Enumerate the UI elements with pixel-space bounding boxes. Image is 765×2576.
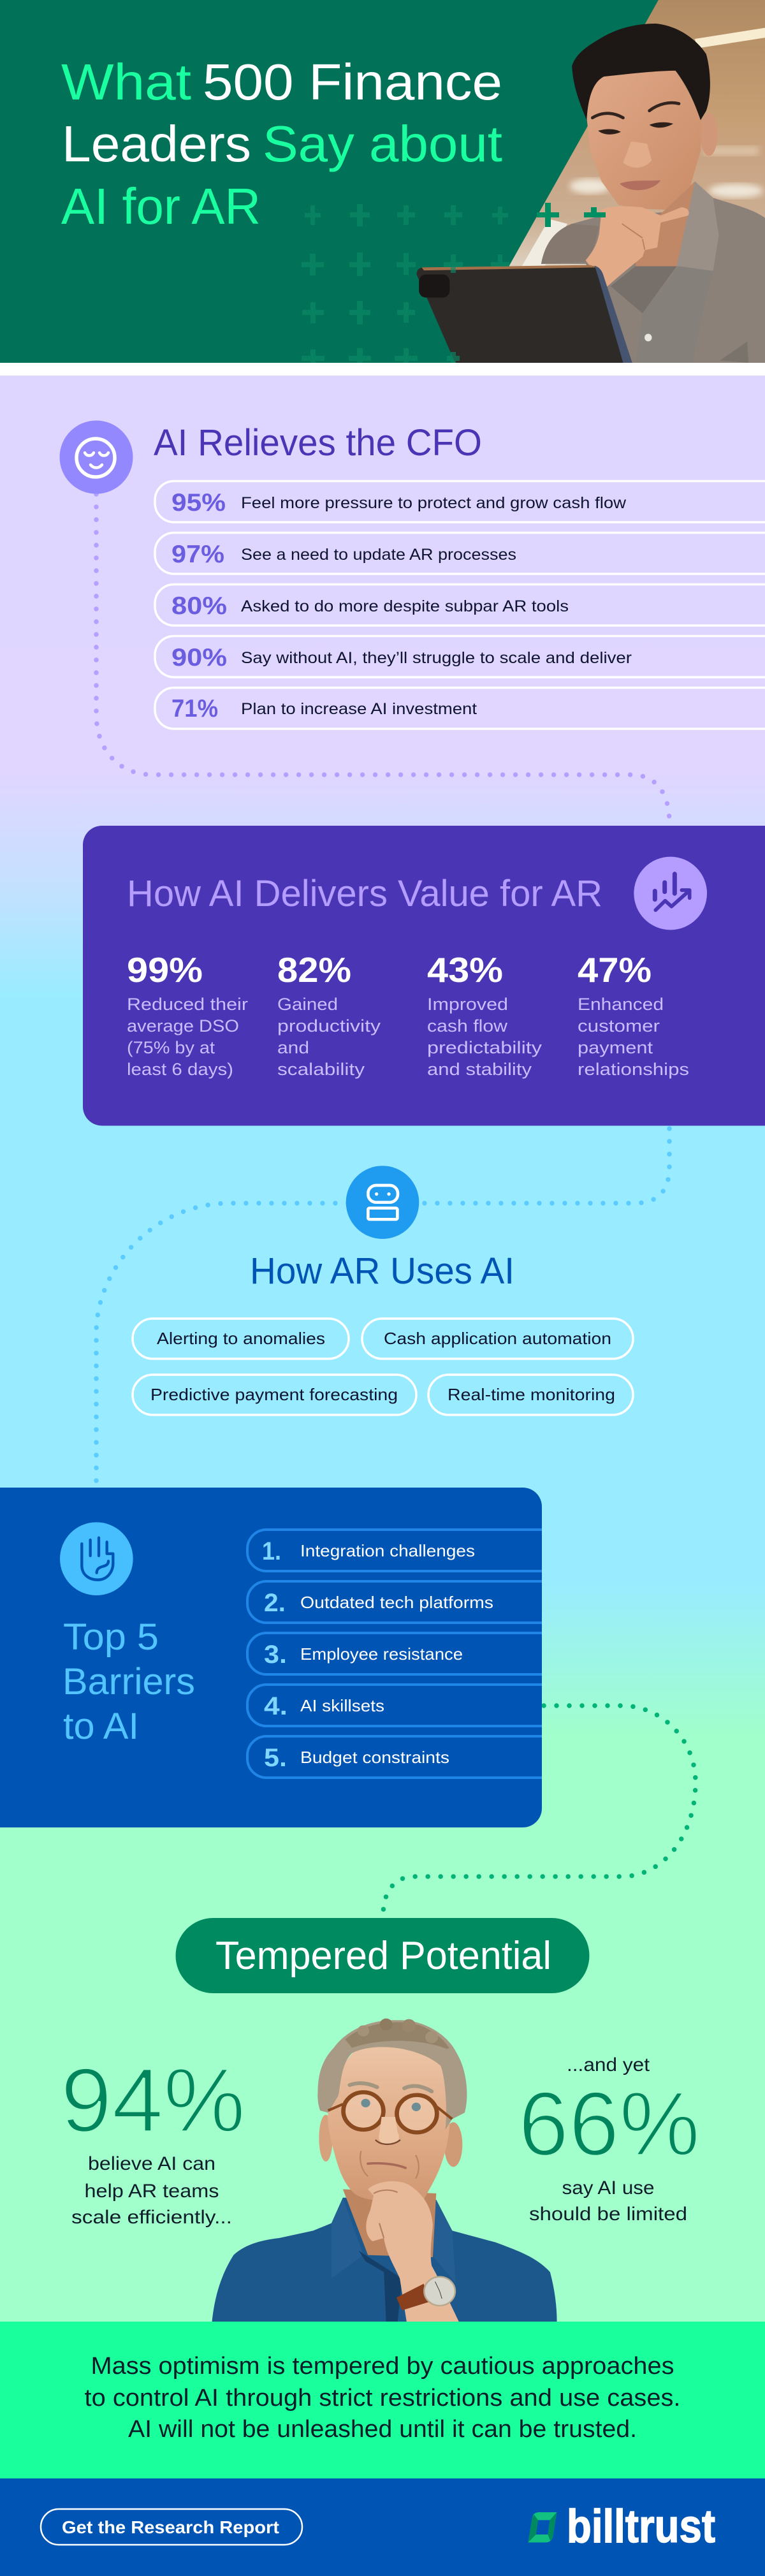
heading: to AI bbox=[63, 1706, 139, 1747]
stat 47%: payment bbox=[578, 1038, 653, 1057]
chip: real-time: Real-time monitoring bbox=[448, 1385, 615, 1404]
stat 94% bbox=[61, 2050, 245, 2228]
shirt bbox=[212, 2198, 557, 2322]
logo: billtrust: billtrust bbox=[567, 2501, 715, 2552]
title: Leaders bbox=[62, 115, 251, 172]
stat 47%: Enhanced bbox=[578, 995, 664, 1014]
barrier 4 bbox=[247, 1685, 542, 1726]
stat row 97%: See a need to update AR processes bbox=[241, 546, 516, 564]
heading: How AI Delivers Value for AR bbox=[127, 873, 602, 914]
barrier 4: 4. bbox=[264, 1692, 288, 1720]
stat 99%: average DSO bbox=[127, 1016, 239, 1036]
chip: cash application: Cash application automation bbox=[384, 1329, 611, 1348]
panel: AI Relieves the CFO bbox=[60, 421, 765, 729]
stat row 95% bbox=[155, 481, 765, 522]
hand bbox=[586, 206, 689, 288]
chip: cash application bbox=[362, 1319, 633, 1359]
stat row 90%: Say without AI, they’ll struggle to scale and deliver bbox=[241, 649, 632, 667]
chip: predictive: Predictive payment forecasting bbox=[150, 1385, 398, 1404]
stat 47% bbox=[578, 950, 689, 1079]
barrier 5: Budget constraints bbox=[300, 1748, 449, 1767]
plus pattern bbox=[302, 203, 606, 363]
title: Say about bbox=[263, 115, 502, 172]
barrier 5: 5. bbox=[264, 1744, 287, 1772]
stat 43%: cash flow bbox=[427, 1016, 508, 1036]
stat row 80%: Asked to do more despite subpar AR tools bbox=[241, 597, 569, 615]
panel: hero header bbox=[0, 0, 765, 363]
stat 82%: scalability bbox=[277, 1060, 365, 1079]
title: What bbox=[61, 54, 191, 110]
ear bbox=[701, 113, 718, 156]
stat 99%: 99% bbox=[127, 950, 203, 990]
stat row 90% bbox=[155, 636, 765, 677]
heading: Top 5 bbox=[63, 1616, 159, 1658]
icon: relaxed face bbox=[60, 421, 133, 494]
stat row 71%: Plan to increase AI investment bbox=[241, 700, 477, 718]
icon: chart trending up bbox=[634, 857, 707, 930]
panel: Top 5 Barriers to AI bbox=[0, 1488, 542, 1827]
dotted connector: barriers to tempered potential bbox=[383, 1706, 696, 1915]
nose and mouth bbox=[379, 2117, 399, 2144]
stat 43% bbox=[427, 950, 543, 1079]
stat row 71% bbox=[155, 687, 765, 729]
eyes bbox=[361, 2099, 370, 2107]
stat row 80% bbox=[155, 584, 765, 626]
stat 66%: say AI use bbox=[562, 2177, 654, 2199]
banner: conclusion text: Mass optimism is tempered by cautious approaches bbox=[91, 2353, 674, 2380]
button: get the report: Get the Research Report bbox=[62, 2517, 279, 2537]
stat row 80%: 80% bbox=[171, 592, 227, 620]
heading: AI Relieves the CFO bbox=[154, 422, 482, 464]
stat 43%: and stability bbox=[427, 1060, 532, 1079]
heading bbox=[62, 1616, 195, 1747]
hero photo: man with tablet bbox=[408, 0, 765, 363]
stat row 90%: 90% bbox=[171, 644, 227, 671]
barrier 5 bbox=[247, 1736, 542, 1778]
heading pill bbox=[176, 1918, 589, 1993]
stat 43%: 43% bbox=[427, 950, 503, 990]
stat 66%: should be limited bbox=[529, 2204, 687, 2225]
stat 66%: 66% bbox=[518, 2074, 700, 2175]
hand and arm bbox=[366, 2181, 459, 2322]
barrier 3: 3. bbox=[264, 1641, 287, 1669]
stat row 95%: Feel more pressure to protect and grow cash flow bbox=[241, 494, 627, 512]
watch bbox=[397, 2284, 430, 2310]
stat 47%: relationships bbox=[578, 1060, 689, 1079]
stat 43%: Improved bbox=[427, 995, 508, 1014]
chip: alerting: Alerting to anomalies bbox=[157, 1329, 325, 1348]
dotted connector: value panel to barriers bbox=[96, 1129, 669, 1486]
stat 47%: customer bbox=[578, 1016, 660, 1036]
neck bbox=[636, 181, 695, 267]
barrier 1 bbox=[247, 1530, 542, 1571]
stat 43%: predictability bbox=[427, 1038, 543, 1057]
panel: How AR Uses AI bbox=[133, 1166, 633, 1415]
panel: Tempered Potential bbox=[61, 1918, 700, 2322]
stat 94%: believe AI can bbox=[88, 2153, 215, 2174]
stat row 97% bbox=[155, 533, 765, 574]
stat 94%: help AR teams bbox=[84, 2181, 219, 2202]
icon: raised hand bbox=[60, 1522, 133, 1595]
heading: How AR Uses AI bbox=[250, 1250, 514, 1292]
barrier 1: 1. bbox=[262, 1537, 281, 1565]
dotted connector: CFO to value panel bbox=[96, 494, 669, 823]
glasses bbox=[344, 2092, 437, 2132]
photo: thoughtful older man bbox=[212, 2019, 557, 2322]
stat 82%: productivity bbox=[277, 1016, 381, 1036]
stat 99% bbox=[127, 950, 248, 1079]
title: 500 Finance bbox=[203, 54, 502, 110]
hair bbox=[317, 2020, 467, 2130]
banner: conclusion text: AI will not be unleashed until it can be trusted. bbox=[128, 2416, 637, 2443]
chip: alerting bbox=[133, 1319, 349, 1359]
title bbox=[61, 62, 502, 224]
barrier 3: Employee resistance bbox=[300, 1644, 463, 1664]
neck bbox=[343, 2189, 436, 2257]
panel: How AI Delivers Value for AR bbox=[83, 826, 765, 1126]
button: get the report bbox=[41, 2509, 302, 2545]
stat row 95%: 95% bbox=[171, 489, 226, 516]
stat 82%: and bbox=[277, 1038, 309, 1057]
tablet bbox=[417, 266, 631, 363]
ears bbox=[319, 2115, 333, 2162]
heading pill: Tempered Potential bbox=[215, 1934, 551, 1978]
footer bbox=[0, 2478, 765, 2576]
stat 82%: Gained bbox=[277, 995, 338, 1014]
stat 66%: ...and yet bbox=[567, 2054, 650, 2075]
stat row 97%: 97% bbox=[171, 541, 224, 568]
page background gradient bbox=[0, 376, 765, 2322]
icon: robot bbox=[346, 1166, 419, 1239]
stat 94%: 94% bbox=[61, 2050, 245, 2151]
face bbox=[328, 2044, 450, 2202]
brows, eyes, nose, mouth bbox=[592, 103, 679, 118]
banner: conclusion text bbox=[0, 2322, 765, 2478]
barrier 1: Integration challenges bbox=[300, 1541, 475, 1560]
stat 99%: least 6 days) bbox=[127, 1060, 233, 1079]
banner: conclusion text: to control AI through strict restrictions and use cases. bbox=[84, 2385, 681, 2411]
barrier 2 bbox=[247, 1581, 542, 1623]
stat 66% bbox=[518, 2054, 700, 2225]
chip: real-time bbox=[428, 1375, 633, 1415]
stat 82% bbox=[277, 950, 381, 1079]
barrier 2: Outdated tech platforms bbox=[300, 1593, 493, 1612]
heading: Barriers bbox=[62, 1661, 195, 1702]
title: AI for AR bbox=[61, 178, 261, 235]
barrier 4: AI skillsets bbox=[300, 1696, 384, 1715]
barrier 2: 2. bbox=[264, 1589, 286, 1617]
hair bbox=[572, 24, 710, 120]
barrier 3 bbox=[247, 1633, 542, 1674]
chip: predictive bbox=[133, 1375, 416, 1415]
stat 82%: 82% bbox=[277, 950, 351, 990]
stat 94%: scale efficiently... bbox=[71, 2207, 232, 2228]
stat row 71%: 71% bbox=[171, 695, 218, 722]
stat 47%: 47% bbox=[578, 950, 652, 990]
face bbox=[586, 71, 702, 210]
shirt bbox=[541, 181, 765, 363]
stat 99%: Reduced their bbox=[127, 995, 248, 1014]
stat 99%: (75% by at bbox=[127, 1038, 215, 1057]
brows bbox=[350, 2083, 432, 2091]
